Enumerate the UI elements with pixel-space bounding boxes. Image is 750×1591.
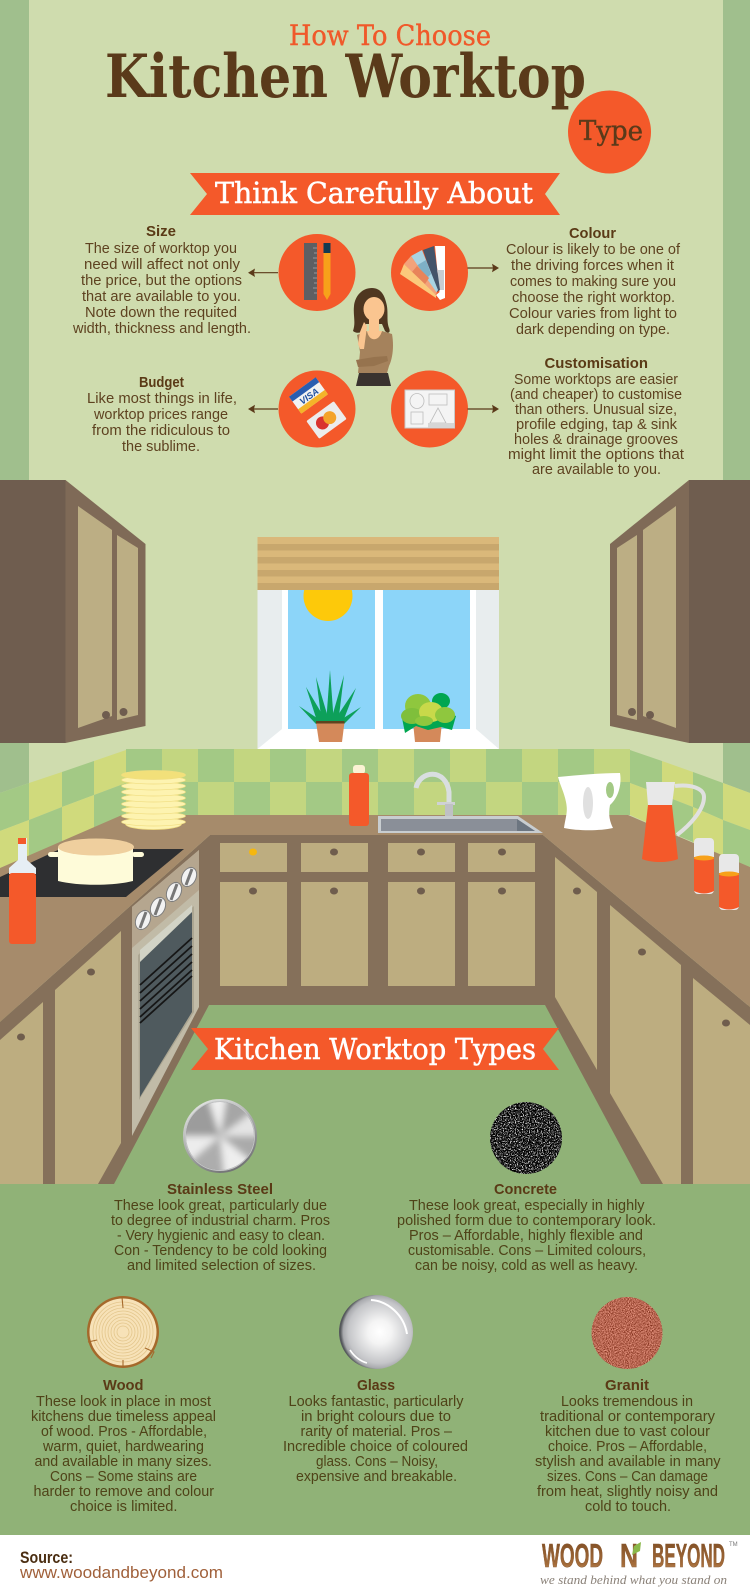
text: wood: choice is limited. [70, 1499, 178, 1515]
panel: budget text: Budget [139, 374, 184, 391]
swatch: wood [87, 1296, 159, 1368]
panel: colour text: dark depending on type. [516, 321, 670, 338]
text: stainless steel [111, 1181, 330, 1274]
logo: wood n beyond: TM [729, 1542, 738, 1548]
icon: colour swatch fan [391, 234, 468, 311]
cabinet knobs [17, 848, 730, 1040]
text: concrete: customisable. Cons – Limited colours, [408, 1243, 646, 1259]
panel: size text: width, thickness and length. [72, 320, 251, 337]
panel: customisation text [508, 355, 685, 478]
text: concrete: These look great, especially in highly [409, 1198, 645, 1214]
text: granit: Looks tremendous in [561, 1394, 693, 1410]
arrow: to colour text [468, 264, 499, 272]
text: wood: warm, quiet, hardwearing [42, 1439, 204, 1455]
panel: size text: The size of worktop you [85, 240, 237, 257]
right wall strip [723, 0, 750, 793]
text: granit: stylish and available in many [535, 1454, 721, 1470]
swatch: stainless steel [183, 1099, 257, 1173]
panel: budget text: the sublime. [122, 438, 200, 455]
ribbon heading: kitchen worktop types: Kitchen Worktop Types [214, 1032, 536, 1066]
source credit: www.woodandbeyond.com [19, 1563, 223, 1582]
text: granit: cold to touch. [585, 1499, 671, 1515]
text: glass [283, 1377, 468, 1485]
title [105, 19, 651, 174]
text: wood: These look in place in most [36, 1394, 211, 1410]
text: granit: from heat, slightly noisy and [537, 1484, 718, 1500]
tap [416, 774, 455, 816]
icon: sun [304, 571, 352, 621]
panel: budget text: from the ridiculous to [92, 422, 230, 439]
panel: size text: that are available to you. [82, 288, 241, 305]
right doors [555, 857, 750, 1184]
floor [0, 1005, 750, 1535]
plant: leafy in pot [401, 693, 456, 742]
panel: colour text: comes to making sure you [510, 273, 676, 290]
panel: budget text [87, 374, 237, 455]
swatch: glass [339, 1295, 413, 1369]
text: wood: and available in many sizes. [34, 1454, 212, 1470]
text: wood: Cons – Some stains are [50, 1469, 197, 1485]
text: glass: expensive and breakable. [296, 1469, 457, 1485]
panel: customisation text: holes & drainage grooves [514, 431, 678, 448]
logo: wood n beyond: N [620, 1537, 638, 1574]
text: wood: kitchens due timeless appeal [31, 1409, 216, 1425]
arrow: to customisation text [468, 405, 499, 413]
lower green band [0, 1184, 750, 1535]
left wall strip [0, 0, 29, 793]
hair [353, 288, 390, 333]
text: granit: Granit [605, 1377, 649, 1394]
panel: size text [72, 223, 251, 337]
text: concrete: can be noisy, cold as well as heavy. [415, 1258, 638, 1274]
panel: size text: need will affect not only [84, 256, 240, 273]
bottle: centre [349, 765, 369, 826]
panel: size text: Note down the requited [85, 304, 237, 321]
text: glass: in bright colours due to [301, 1409, 451, 1425]
text: glass: Incredible choice of coloured [283, 1439, 468, 1455]
panel: customisation text: Customisation [544, 355, 648, 372]
icon: ruler and pencil [278, 234, 356, 311]
panel: colour text [506, 225, 681, 338]
panel: size text: the price, but the options [81, 272, 242, 289]
title: kitchen worktop: Kitchen Worktop [105, 42, 586, 112]
kettle [558, 773, 621, 830]
text: wood: Wood [103, 1377, 144, 1394]
text: granit [535, 1377, 721, 1515]
hob [0, 849, 184, 897]
oven rack [140, 938, 192, 1023]
icon: credit cards [278, 370, 356, 448]
oven [132, 850, 200, 1136]
panel: customisation text: profile edging, tap & sink [516, 416, 677, 433]
sink [378, 816, 543, 833]
panel: customisation text: (and cheaper) to customise [510, 386, 682, 403]
text: wood: of wood. Pros - Affordable, [41, 1424, 207, 1440]
title: how to choose: How To Choose [289, 19, 491, 52]
text: stainless steel: Con - Tendency to be cold looking [114, 1243, 327, 1259]
text: stainless steel: Stainless Steel [167, 1181, 273, 1198]
panel: customisation text: than others. Unusual size, [515, 401, 677, 418]
arrow: to budget text [248, 405, 278, 413]
text: granit: kitchen due to vast colour [545, 1424, 710, 1440]
panel: customisation text: Some worktops are easier [514, 371, 678, 388]
panel: size text: Size [146, 223, 176, 240]
raised hand and arm [358, 322, 367, 349]
text: glass: Looks fantastic, particularly [288, 1394, 464, 1410]
skirt [356, 373, 391, 386]
logo: wood n beyond [540, 1537, 738, 1587]
swatch: concrete [490, 1102, 562, 1174]
panel: customisation text: are available to you. [532, 461, 661, 478]
panel: budget text: worktop prices range [93, 406, 228, 423]
worktop [0, 815, 750, 1022]
panel: budget text: Like most things in life, [87, 390, 237, 407]
neck and face [369, 316, 379, 332]
logo: wood n beyond: WOOD [542, 1537, 603, 1574]
panel: colour text: Colour [569, 225, 616, 242]
badge: type [568, 90, 651, 174]
text: stainless steel: These look great, particularly due [114, 1198, 327, 1214]
torso [357, 331, 393, 373]
logo: wood n beyond: we stand behind what you stand on [540, 1572, 727, 1587]
figure: thinking woman [353, 288, 393, 386]
text: granit: traditional or contemporary [540, 1409, 716, 1425]
badge: type: Type [579, 116, 643, 147]
bottle: left [9, 838, 36, 944]
source credit: Source: [20, 1548, 73, 1567]
roller blind [258, 537, 499, 590]
upper cabinet: left [0, 480, 146, 743]
icon: customisation plan [391, 370, 468, 448]
jug [642, 782, 704, 862]
base cabinets [0, 835, 750, 1184]
pot [48, 838, 144, 885]
text: granit: choice. Pros – Affordable, [548, 1439, 707, 1455]
text: granit: sizes. Cons – Can damage [547, 1469, 708, 1485]
source credit [19, 1548, 223, 1582]
panel: customisation text: might limit the options that [508, 446, 685, 463]
text: stainless steel: and limited selection of sizes. [127, 1258, 316, 1274]
icon: credit cards: VISA [298, 386, 321, 407]
text: stainless steel: to degree of industrial charm. Pros [111, 1213, 330, 1229]
plate stack [122, 770, 186, 830]
window [258, 537, 499, 749]
text: concrete [397, 1181, 656, 1274]
panel: colour text: the driving forces when it [511, 257, 675, 274]
text: glass: glass. Cons – Noisy, [316, 1454, 438, 1470]
glass: first [694, 838, 714, 894]
text: wood: harder to remove and colour [34, 1484, 214, 1500]
oven knobs [132, 865, 200, 932]
text: glass: rarity of material. Pros – [300, 1424, 453, 1440]
upper cabinet: right [610, 480, 750, 743]
glass: second [719, 854, 739, 910]
tile splashback [0, 749, 750, 868]
footer [0, 1535, 750, 1591]
text: concrete: Pros – Affordable, highly flexible and [409, 1228, 643, 1244]
text: concrete: Concrete [494, 1181, 557, 1198]
panel: colour text: choose the right worktop. [512, 289, 675, 306]
panel: colour text: Colour is likely to be one of [506, 241, 681, 258]
text: stainless steel: - Very hygienic and easy to clean. [117, 1228, 325, 1244]
text: wood [31, 1377, 216, 1515]
text: concrete: polished form due to contemporary look. [397, 1213, 656, 1229]
left doors [0, 931, 121, 1184]
ribbon heading: think carefully about: Think Carefully About [215, 176, 533, 210]
back doors and drawers [220, 843, 535, 986]
plant: aloe in pot [299, 670, 361, 742]
panel: colour text: Colour varies from light to [509, 305, 677, 322]
text: glass: Glass [357, 1377, 395, 1394]
swatch: granite [592, 1297, 662, 1369]
arrow: to size text [248, 268, 278, 277]
